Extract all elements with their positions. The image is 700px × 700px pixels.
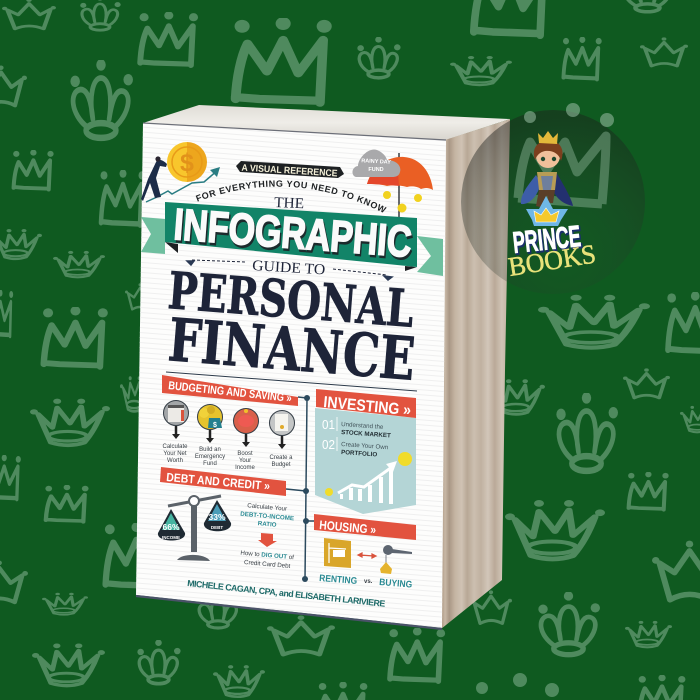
book side page edge [441, 119, 510, 629]
label: calculate your net worth: Worth [167, 458, 183, 464]
icon: piggy bank [234, 408, 258, 447]
green ribbon banner [141, 202, 443, 276]
label: buying: BUYING [379, 577, 413, 591]
icon: for rent sign [324, 538, 351, 568]
section: housing [314, 514, 416, 591]
icon: balance scale with percent weights: INCOME [162, 535, 180, 540]
section: budgeting and saving [162, 375, 298, 471]
label: vs: vs. [364, 579, 373, 585]
icon: umbrella with rain cloud and coins [352, 150, 433, 218]
text: calculate your debt-to-income ratio: DEBT-TO-INCOME [240, 511, 294, 522]
text: calculate your debt-to-income ratio: Calculate Your [247, 502, 287, 513]
title words: guide to with dashed arrows: GUIDE TO [252, 258, 326, 278]
title word: infographic: INFOGRAPHIC [174, 203, 415, 269]
step 01: understand the stock market: 01 [322, 417, 335, 432]
badge: a visual reference: A VISUAL REFERENCE [241, 163, 338, 179]
step 02: create your own portfolio [322, 437, 389, 459]
icon: star with crown [526, 196, 568, 226]
step 01: understand the stock market: Understand the [341, 421, 384, 431]
label: boost your income: Income [235, 465, 255, 471]
logo word: prince [511, 220, 584, 261]
arched subtitle: FOR EVERYTHING YOU NEED TO KNOW [196, 180, 387, 212]
label: build an emergency fund: Fund [203, 461, 217, 467]
text: how to dig out of credit card debt: How to DIG OUT of [240, 550, 294, 561]
icon: balance scale with percent weights: DEBT [211, 525, 223, 530]
icon: budget document [270, 410, 294, 449]
arrow: double-headed red [358, 553, 376, 558]
heading banner: investing: INVESTING » [323, 394, 412, 419]
label: boost your income: Boost [237, 451, 253, 457]
heading banner: housing: HOUSING » [319, 518, 377, 537]
icon: balance scale with percent weights [158, 496, 231, 561]
label: boost your income: Your [239, 458, 251, 464]
label: renting: RENTING [319, 573, 358, 587]
step 02: create your own portfolio: 02 [322, 437, 335, 452]
book cover [136, 122, 446, 630]
label: create a budget: Budget [271, 462, 291, 468]
label: calculate your net worth: Your Net [163, 451, 187, 457]
icon: emergency fund coins: $ [213, 422, 217, 429]
step 01: understand the stock market [322, 417, 391, 439]
arrow: red down arrow [258, 533, 277, 547]
book [136, 105, 510, 630]
icon: rising white chart with suns [325, 452, 412, 504]
label: calculate your net worth: Calculate [162, 444, 188, 450]
icon: umbrella with rain cloud and coins: FUND [368, 167, 384, 173]
step 02: create your own portfolio: Create Your Own [341, 441, 389, 451]
logo word: prince: PRINCE [511, 220, 582, 260]
icon: key and house [380, 545, 412, 574]
step 02: create your own portfolio: PORTFOLIO [341, 449, 378, 459]
label: build an emergency fund: Emergency [195, 454, 225, 460]
title word: finance: FINANCE [166, 305, 418, 394]
title word: infographic: INFOGRAPHIC [172, 200, 413, 267]
teal panel [315, 408, 416, 514]
step 01: understand the stock market: STOCK MARKET [341, 429, 391, 439]
publisher logo badge [461, 103, 645, 294]
icon: balance scale with percent weights: 66% [162, 522, 180, 532]
title word: personal: PERSONAL [166, 261, 416, 340]
title word: the: THE [274, 195, 304, 212]
section: investing [315, 389, 416, 514]
text: calculate your debt-to-income ratio [240, 502, 294, 529]
logo word: books: BOOKS [506, 239, 598, 282]
translucent dark circle [461, 110, 645, 294]
label: boost your income [235, 451, 255, 471]
text: how to dig out of credit card debt [240, 550, 294, 570]
label: create a budget: Create a [269, 455, 293, 461]
authors: MICHELE CAGAN, CPA, and ELISABETH LARIVIERE [187, 578, 386, 609]
logo word: prince: PRINCE [512, 221, 584, 261]
text: calculate your debt-to-income ratio: RATIO [257, 520, 277, 529]
label: calculate your net worth [162, 444, 188, 464]
icon: man pushing coin up a rising arrow [141, 142, 220, 202]
label: build an emergency fund: Build an [199, 447, 221, 453]
icon: balance scale with percent weights: 33% [208, 512, 226, 522]
book top page edge [143, 105, 510, 140]
heading banner: budgeting and saving: BUDGETING AND SAVING » [168, 380, 292, 405]
heading banner: debt and credit: DEBT AND CREDIT » [166, 470, 271, 493]
timeline spine with nodes [286, 395, 314, 582]
icon: man pushing coin up a rising arrow: $ [180, 149, 194, 177]
label: build an emergency fund [195, 447, 225, 467]
cover paper [136, 123, 446, 628]
icon: prince character [521, 131, 573, 207]
section: debt and credit [158, 467, 294, 570]
label: create a budget [269, 455, 293, 468]
title words: guide to with dashed arrows [187, 258, 392, 280]
icon: umbrella with rain cloud and coins: RAINY DAY [361, 158, 391, 166]
text: how to dig out of credit card debt: Credit Card Debt [244, 559, 291, 570]
icon: calculator [164, 400, 188, 439]
